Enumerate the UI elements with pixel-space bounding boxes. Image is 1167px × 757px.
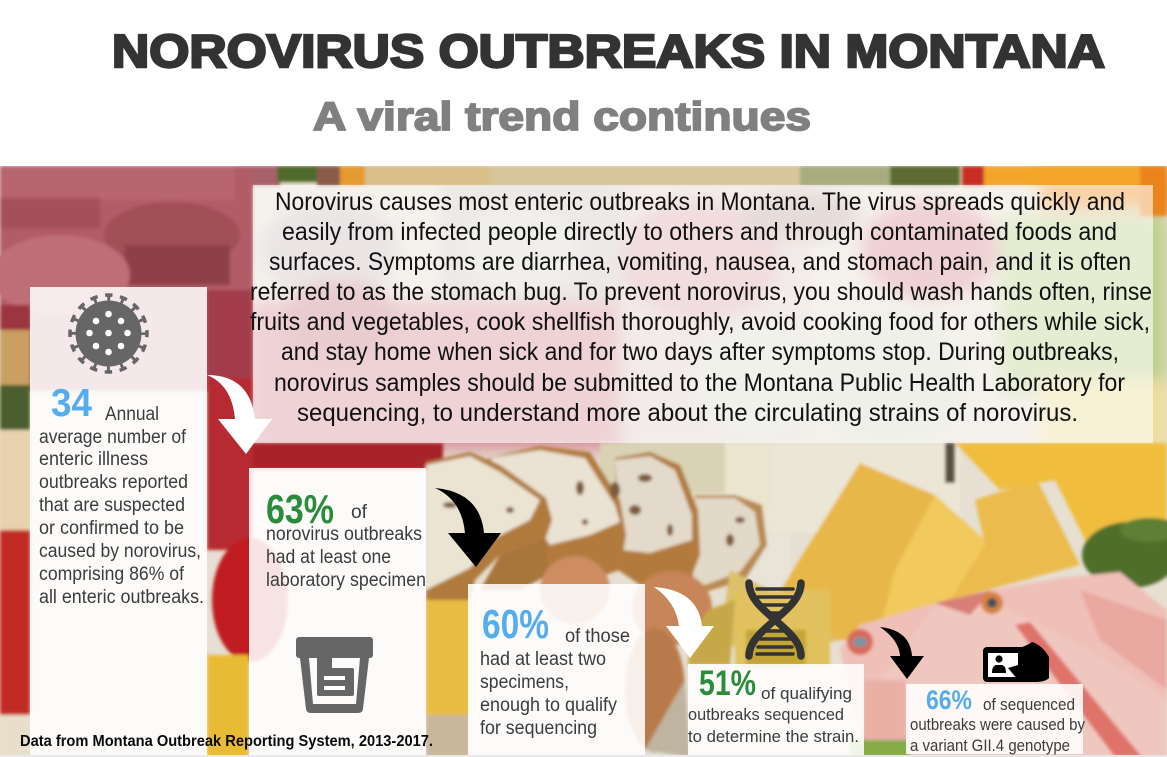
panel: annual outbreaks: comprising 86% of — [39, 564, 185, 585]
panel: two specimens: 60% — [482, 601, 549, 647]
icon: DNA helix — [749, 583, 801, 656]
left side — [0, 330, 30, 390]
greens — [1082, 522, 1167, 588]
panel: two specimens — [468, 584, 645, 755]
eggs — [540, 556, 610, 624]
bread slice 4 — [690, 495, 767, 592]
bread slice 3 — [615, 452, 700, 585]
panel: genotype: 66% — [926, 685, 972, 715]
page bottom strip — [0, 755, 1167, 757]
panel: sequenced outbreaks: outbreaks sequenced — [688, 705, 844, 724]
panel: annual outbreaks: enteric illness — [39, 449, 148, 470]
arrow: white, panel 1 to panel 2 — [207, 375, 272, 454]
panel: sequenced outbreaks: 51% — [699, 664, 756, 703]
icon: specimen cup — [296, 637, 373, 713]
panel: annual outbreaks: or confirmed to be — [39, 518, 184, 539]
subtitle: A viral trend continues — [313, 95, 811, 139]
panel: sequenced outbreaks — [688, 664, 864, 755]
arrow: black, panel 4 to panel 5 — [880, 627, 924, 679]
background photo: assorted foods — [0, 166, 1167, 757]
panel: annual outbreaks: 34 — [51, 382, 92, 425]
top row produce — [250, 166, 282, 188]
panel: annual outbreaks: average number of — [39, 427, 187, 448]
panel: genotype: a variant GII.4 genotype — [910, 736, 1070, 755]
panel: annual outbreaks — [30, 287, 207, 755]
panel: intro text: easily from infected people directly to others and through contaminated foods and — [282, 218, 1117, 246]
background behind bread — [690, 444, 769, 509]
panel: two specimens: of those — [565, 626, 630, 647]
milk and cheese — [770, 443, 960, 533]
panel: annual outbreaks: caused by norovirus, — [39, 541, 201, 562]
bread seeds — [443, 474, 745, 546]
panel: annual outbreaks: Annual — [105, 404, 159, 425]
arrow: white, panel 3 to panel 4 — [654, 587, 714, 658]
panel: laboratory specimen: 63% — [266, 486, 334, 532]
panel: genotype: of sequenced — [983, 695, 1075, 714]
panel: two specimens: had at least two — [480, 649, 606, 670]
panel: sequenced outbreaks: of qualifying — [761, 684, 852, 703]
panel: laboratory specimen: of — [351, 502, 368, 523]
icon: virus — [70, 295, 147, 372]
panel: laboratory specimen: had at least one — [266, 547, 391, 568]
panel: annual outbreaks: outbreaks reported — [39, 472, 188, 493]
panel: two specimens: specimens, — [480, 672, 569, 693]
panel: intro text — [250, 185, 1153, 443]
panel: two specimens: for sequencing — [480, 718, 597, 739]
bread slice 1 — [426, 452, 552, 600]
fish — [840, 572, 1167, 757]
icon: ID card in hand — [983, 642, 1049, 682]
panel: sequenced outbreaks: to determine the strain. — [688, 727, 859, 746]
panel: annual outbreaks: all enteric outbreaks. — [39, 587, 204, 608]
panel: two specimens: enough to qualify — [480, 695, 617, 716]
panel: laboratory specimen: laboratory specimen — [266, 570, 426, 591]
panel: laboratory specimen — [249, 468, 426, 755]
panel: genotype: outbreaks were caused by — [910, 715, 1085, 734]
panel: annual outbreaks: that are suspected — [39, 495, 185, 516]
panel: intro text: sequencing, to understand more about the circulating strains of norovirus. — [297, 399, 1078, 427]
title: NOROVIRUS OUTBREAKS IN MONTANA — [112, 25, 1105, 77]
bread slice 2 — [488, 446, 626, 590]
source note: Data from Montana Outbreak Reporting System, 2013-2017. — [20, 733, 433, 750]
ground meat — [207, 378, 253, 550]
meat — [0, 166, 253, 391]
panel: genotype — [906, 684, 1085, 755]
panel: laboratory specimen: norovirus outbreaks — [266, 524, 422, 545]
arrow: black, panel 2 to panel 3 — [435, 488, 501, 567]
pasta — [207, 655, 249, 757]
